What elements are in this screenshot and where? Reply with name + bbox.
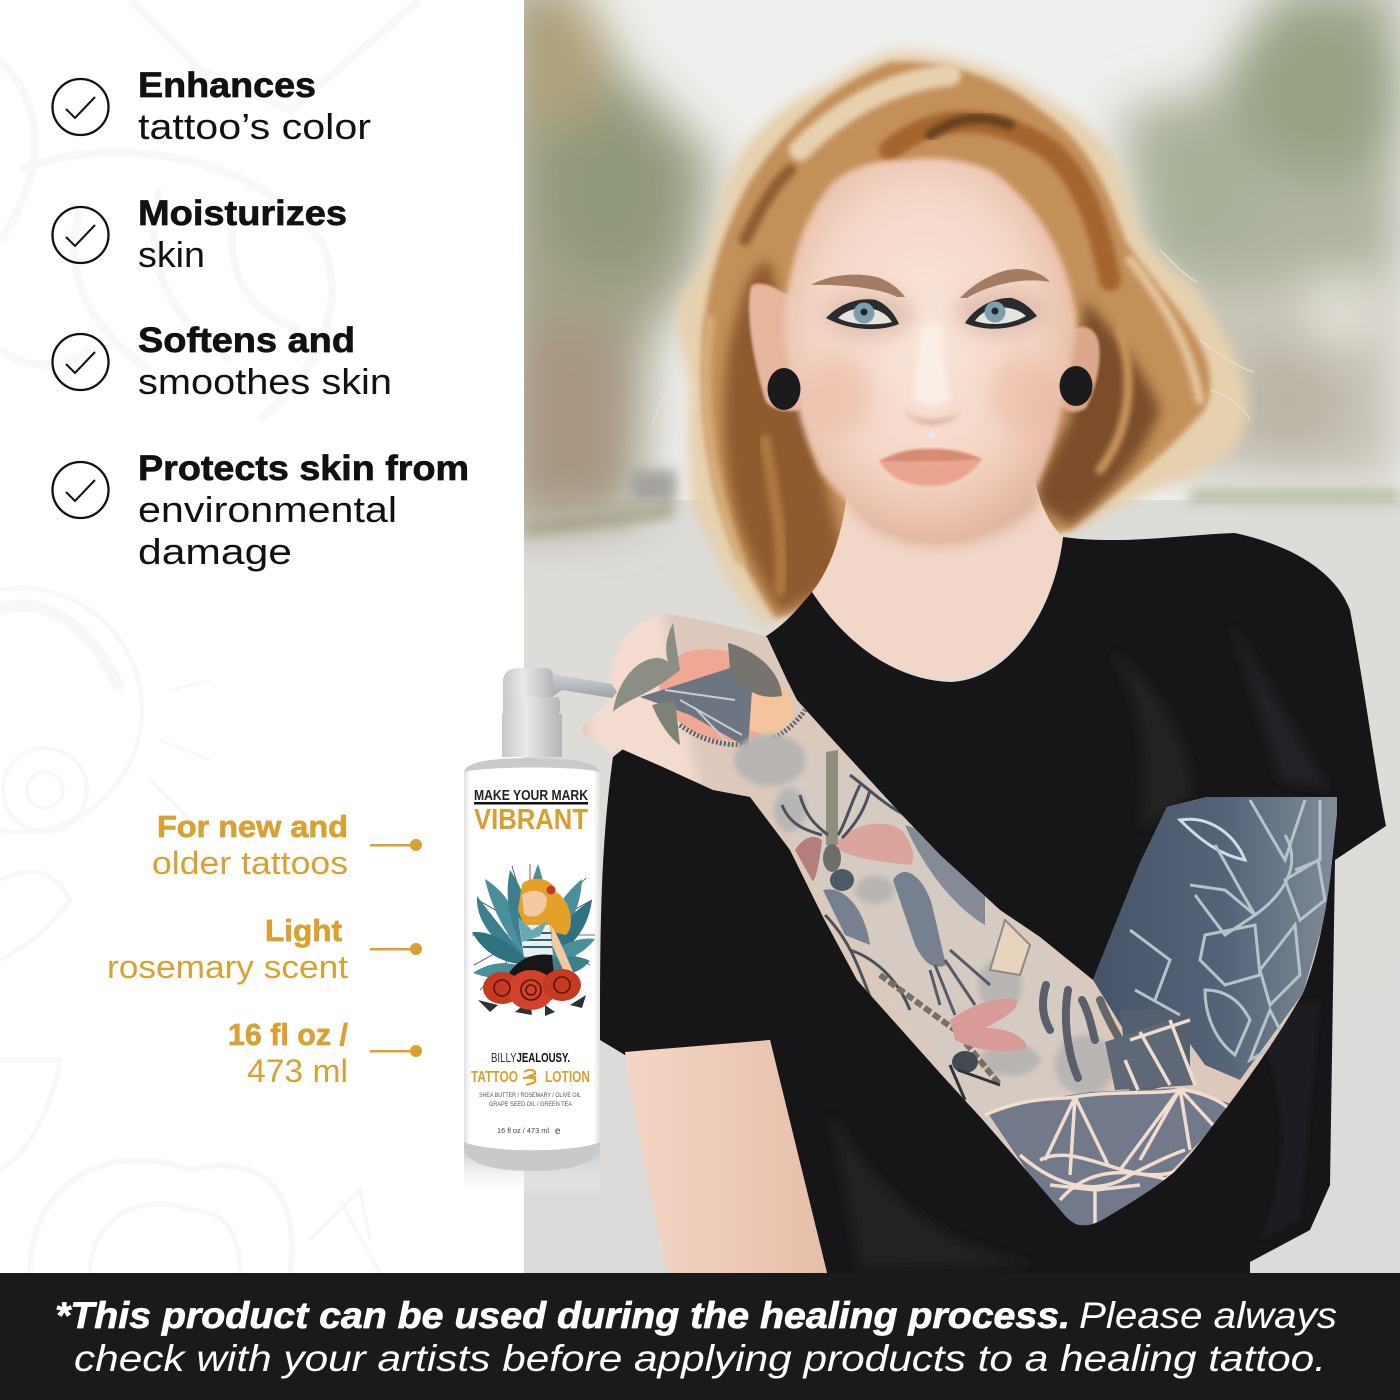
forearm base tone [796, 756, 1051, 1132]
product bottle [464, 668, 617, 1196]
blue-grey insect bodies [823, 825, 985, 967]
icon: check circle [52, 79, 108, 135]
mid golden layer [702, 62, 1210, 618]
dragonfly lower [950, 998, 1027, 1100]
callout: light rosemary scent: rosemary scent [107, 949, 348, 985]
icon: check circle [52, 207, 108, 263]
nose [903, 325, 962, 424]
footer disclaimer banner [0, 1273, 1400, 1400]
eyebrows [811, 269, 1050, 298]
pin-up figure [518, 879, 571, 935]
footer disclaimer banner: Please always [1079, 1295, 1337, 1336]
callout: light rosemary scent: Light [265, 913, 342, 948]
benefit 1: enhances color [52, 66, 371, 147]
benefit 2: moisturizes: skin [138, 234, 205, 275]
footer disclaimer banner: check with your artists before applying products to a healing tattoo. [74, 1338, 1326, 1379]
benefit 4: protects: damage [138, 531, 292, 572]
benefit 1: enhances color: tattoo’s color [138, 106, 371, 147]
ears [749, 284, 800, 411]
upper arm dark [1093, 797, 1337, 1080]
photo background: blurred street and trees [500, 0, 1400, 1273]
product bottle: SHEA BUTTER / ROSEMARY / OLIVE OIL [479, 1092, 581, 1099]
product bottle: e [555, 1126, 561, 1137]
benefit 4: protects [52, 449, 469, 572]
benefit 3: softens [52, 321, 392, 402]
anemone spikes [1043, 985, 1135, 1078]
footer disclaimer banner: *This product can be used during the healing process. [55, 1295, 1070, 1336]
blush shading [804, 290, 1059, 435]
icon: check circle [52, 462, 108, 518]
bottle body [464, 758, 600, 1171]
eyes [826, 298, 1037, 329]
product bottle: GRAPE SEED OIL / GREEN TEA [489, 1101, 573, 1108]
benefit 3: softens: Softens and [138, 321, 355, 360]
benefit 2: moisturizes: Moisturizes [138, 194, 347, 233]
elbow stipple with geometric web [987, 1088, 1235, 1235]
product bottle: 16 fl oz / 473 ml [497, 1128, 549, 1135]
forearm clouds [734, 734, 1115, 1095]
benefit 3: softens: smoothes skin [138, 361, 392, 402]
product bottle: LOTION [545, 1069, 590, 1086]
product bottle: TATTOO [471, 1069, 518, 1086]
shirt [600, 533, 1386, 1273]
neck [812, 470, 1063, 680]
mandala lines [1130, 800, 1325, 1060]
face [749, 158, 1100, 541]
left arm skin [625, 1040, 827, 1273]
benefit 1: enhances color: Enhances [138, 66, 316, 105]
pin-up illustration [472, 864, 595, 1016]
darker brown underlayer right [1030, 300, 1160, 525]
bottle reflection [464, 1148, 600, 1196]
photo: woman with tattoo sleeve [500, 0, 1400, 1273]
leaf motifs [990, 920, 1030, 975]
benefit 2: moisturizes [52, 194, 347, 275]
callout: light rosemary scent [107, 913, 422, 985]
background: white panel with faint tattoo line art [0, 0, 524, 1273]
lips [879, 449, 982, 486]
hand skin [582, 600, 700, 790]
product bottle: VIBRANT [474, 804, 588, 836]
hand tattoo: robin [613, 623, 805, 756]
outer pale blond halo [679, 51, 1247, 625]
callout: new and older tattoos: older tattoos [152, 845, 348, 881]
benefit 4: protects: Protects skin from [138, 449, 469, 488]
callout: bottle size [228, 1017, 422, 1089]
product bottle: BILLYJEALOUSY. [491, 1050, 570, 1065]
icon: dragon mark [523, 1070, 536, 1085]
callout: new and older tattoos [152, 809, 422, 881]
callout: bottle size: 473 ml [247, 1053, 348, 1089]
roses [478, 969, 586, 1016]
ear plugs [768, 366, 1092, 410]
callout: new and older tattoos: For new and [157, 809, 348, 844]
callout: bottle size: 16 fl oz / [228, 1017, 348, 1052]
bottle label text: MAKE YOUR MARK [474, 788, 588, 804]
lip piercing [928, 431, 936, 439]
darker brown underlayer left [724, 260, 845, 612]
benefit 4: protects: environmental [138, 489, 397, 530]
pump [502, 668, 617, 757]
tattooed arm: hand, forearm, elbow, upper arm [570, 600, 1350, 1240]
dragonfly upper [782, 750, 913, 1010]
icon: check circle [52, 334, 108, 390]
wisps [652, 250, 1254, 425]
hair [652, 51, 1254, 625]
highlights and parting [706, 75, 1200, 590]
